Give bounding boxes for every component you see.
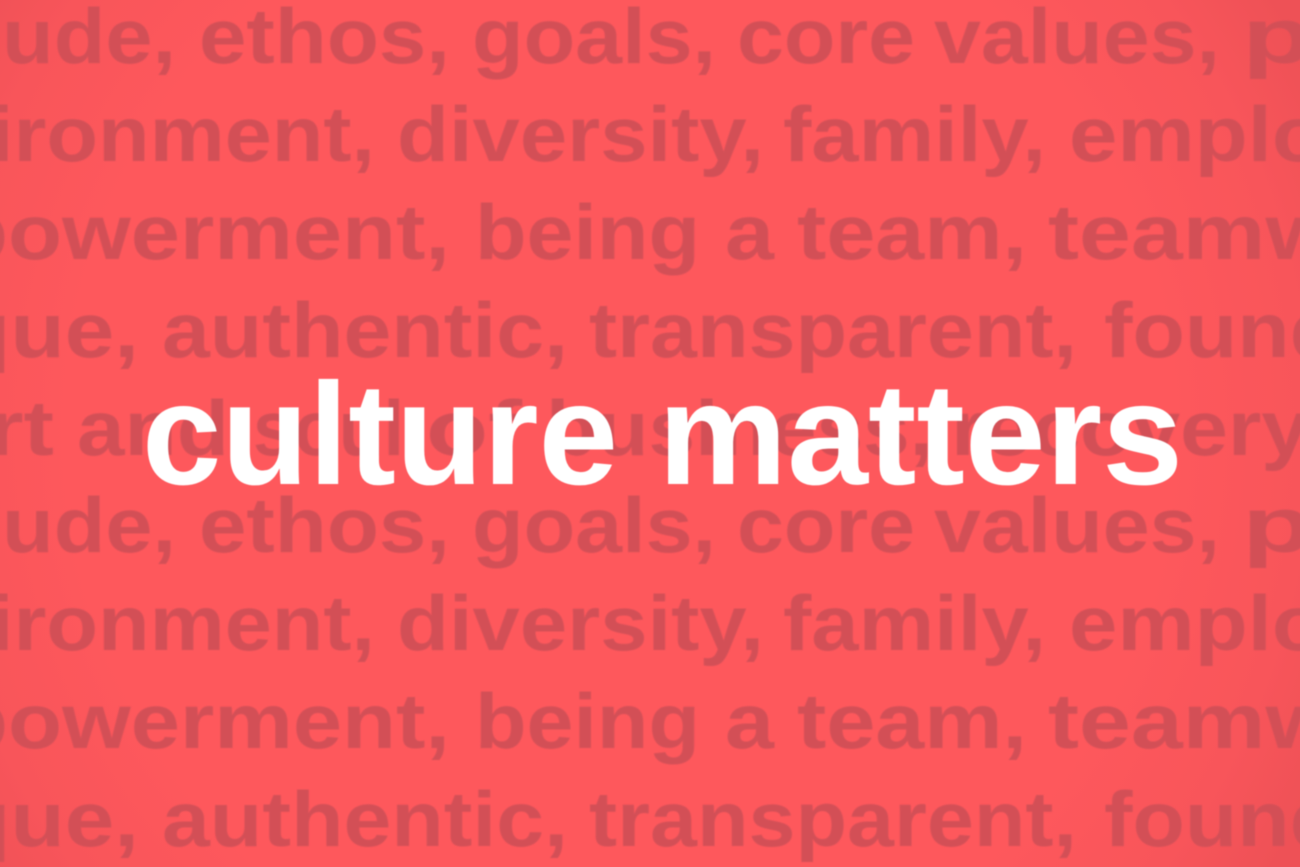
background word pattern: authentic,	[162, 775, 568, 863]
background word pattern: and	[77, 384, 229, 472]
background word pattern: goals,	[472, 481, 716, 569]
background word pattern: emplo	[1069, 579, 1300, 667]
background word pattern: transparent,	[589, 775, 1077, 863]
background word pattern: emplo	[1069, 90, 1300, 178]
background word pattern: core	[737, 481, 915, 569]
background word pattern: diversity,	[397, 579, 764, 667]
background word pattern: family,	[783, 579, 1046, 667]
background word pattern: p	[1242, 481, 1300, 569]
background word pattern: team,	[797, 188, 1027, 276]
background word pattern: diversity,	[397, 90, 764, 178]
background word pattern: being	[475, 188, 700, 276]
background word pattern: transparent,	[589, 286, 1077, 374]
background word pattern: a	[725, 188, 775, 276]
title: culture	[142, 353, 618, 515]
background word pattern: ironment,	[0, 90, 375, 178]
background word pattern: being	[475, 677, 700, 765]
background word pattern: ude,	[2, 481, 176, 569]
background word pattern: soul	[253, 384, 404, 472]
background word pattern: teamw	[1048, 188, 1300, 276]
background word pattern: ethos,	[199, 481, 450, 569]
background word pattern: recovery	[951, 384, 1300, 472]
background word pattern: ironment,	[0, 579, 375, 667]
background word pattern: of	[426, 384, 523, 472]
background word pattern: family,	[783, 90, 1046, 178]
background word pattern: authentic,	[162, 286, 568, 374]
background word pattern: business,	[546, 384, 933, 472]
background word pattern: a	[725, 677, 775, 765]
background word pattern: teamw	[1048, 677, 1300, 765]
background word pattern: values,	[934, 481, 1220, 569]
title: matters	[658, 353, 1183, 515]
title	[142, 353, 1183, 515]
background word pattern: team,	[797, 677, 1027, 765]
